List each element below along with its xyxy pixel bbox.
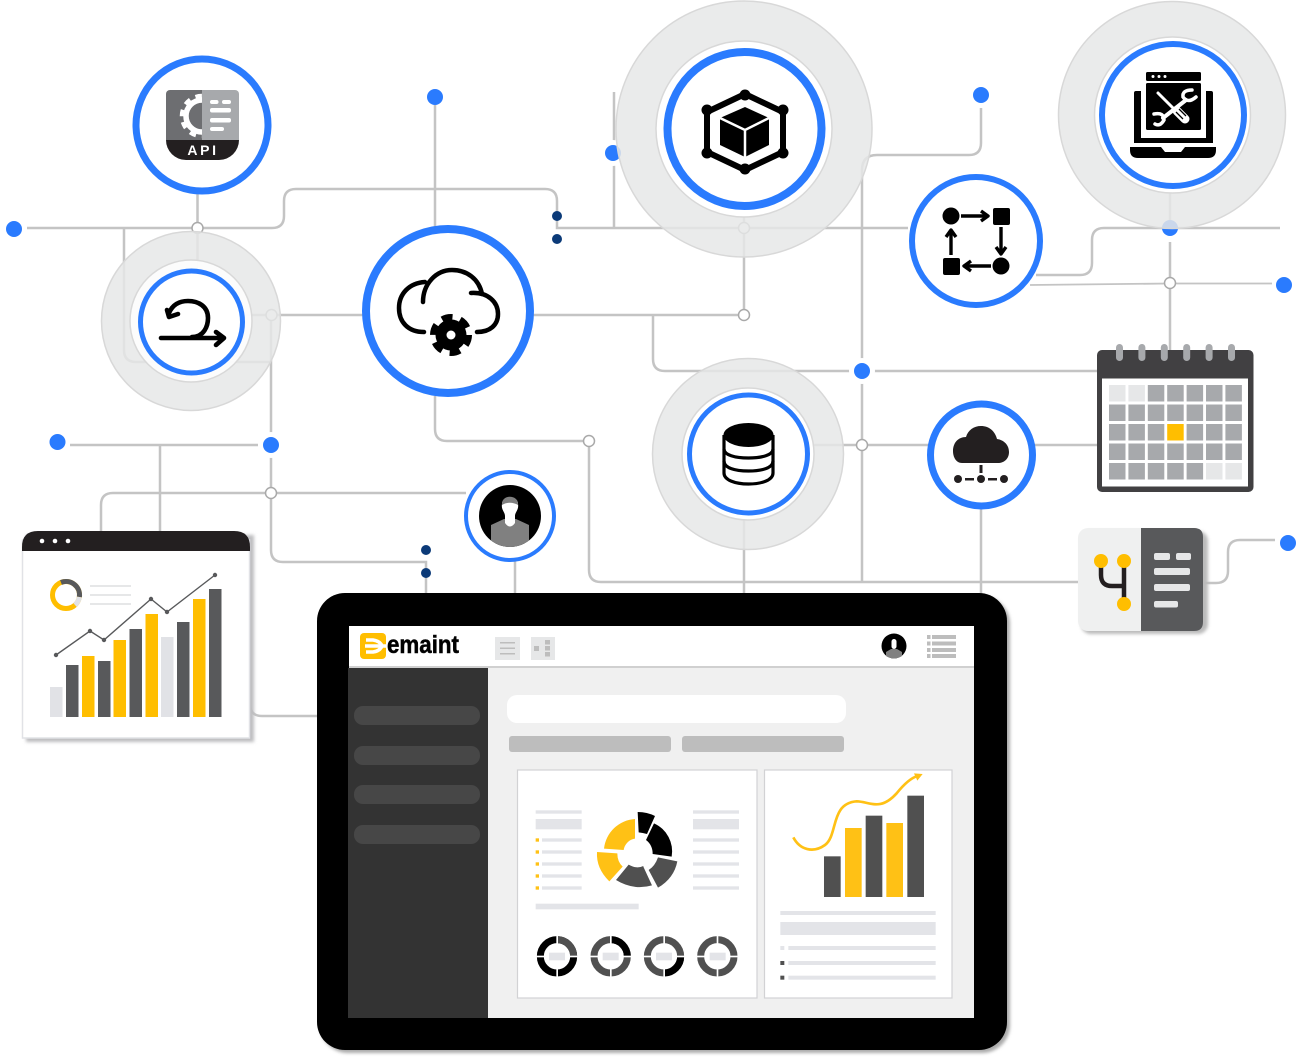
icon: scrum loop <box>140 271 242 373</box>
calendar <box>1097 344 1254 492</box>
header menu icon <box>927 635 956 658</box>
icon: cloud gear <box>366 229 530 393</box>
panel: growth chart card <box>764 770 952 998</box>
panel: workflow branch card <box>1078 528 1208 634</box>
halo: scrum <box>102 232 280 410</box>
calendar day grid <box>1109 385 1242 480</box>
filter buttons <box>509 736 844 752</box>
bar chart <box>50 589 222 717</box>
icon: cube network <box>668 52 822 206</box>
halo: database <box>652 358 844 550</box>
emaint logo: emaint <box>387 631 460 659</box>
icon: database <box>690 395 808 513</box>
icon: cloud network <box>930 404 1032 506</box>
icon: API: API <box>187 142 219 158</box>
connector network <box>27 92 1280 716</box>
icon: tools laptop <box>1102 44 1244 186</box>
panel: donut card <box>518 770 757 998</box>
legend lines <box>536 810 739 909</box>
icon: user avatar <box>466 472 554 560</box>
toolbar icons <box>495 637 555 660</box>
connector end dots <box>6 87 1296 578</box>
growth bars <box>824 796 924 897</box>
connector junction nodes <box>192 222 1176 498</box>
header avatar <box>882 634 906 658</box>
trend line <box>54 573 217 657</box>
halo: cube <box>616 1 872 257</box>
mini donut <box>52 582 80 608</box>
sidebar <box>348 668 488 1018</box>
halo: tools <box>1058 2 1286 228</box>
icon: API <box>136 59 268 191</box>
donut chart <box>597 812 677 888</box>
growth curve <box>793 773 923 850</box>
mini ring gauges <box>540 940 734 973</box>
panel: analytics window <box>22 531 254 742</box>
tablet <box>317 593 1010 1053</box>
calendar rings <box>1116 344 1235 361</box>
emaint logo <box>360 631 460 659</box>
icon: process flow <box>912 177 1040 305</box>
app header <box>349 626 974 668</box>
search field <box>507 695 846 723</box>
card text lines <box>780 911 936 980</box>
